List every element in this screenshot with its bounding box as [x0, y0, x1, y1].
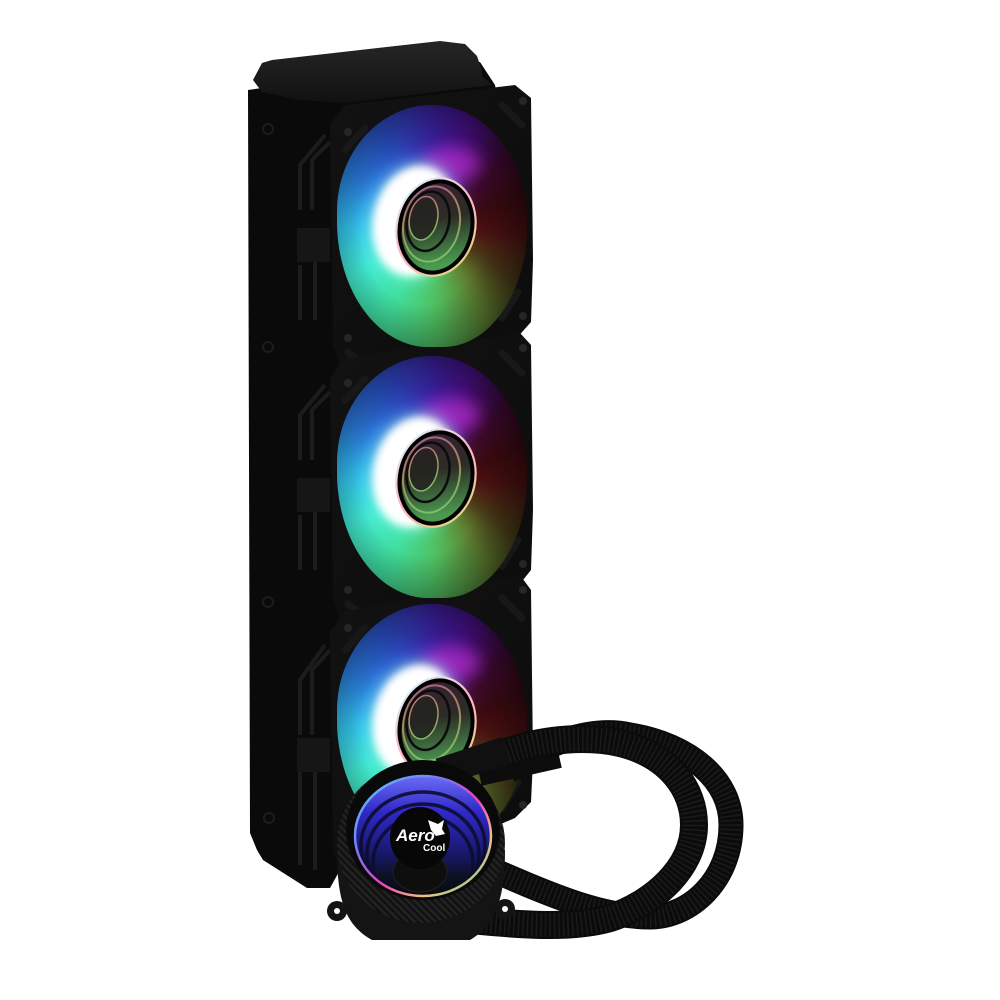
pump and tubes — [327, 720, 744, 940]
radiator fins and struts — [297, 135, 330, 870]
tube: outer braided hose — [470, 733, 731, 917]
fan frame 1 — [330, 85, 533, 380]
radiator top cap — [253, 41, 492, 103]
pump carbon ring — [337, 763, 505, 923]
pump cap — [390, 807, 450, 892]
AeroCool logo — [395, 820, 445, 854]
AeroCool logo: Aero — [395, 826, 435, 845]
pump mounting ears — [327, 899, 515, 921]
fan 3 RGB — [337, 604, 527, 846]
fan frame 3 — [330, 575, 533, 890]
tube connector: upper — [440, 750, 507, 772]
fan 2 RGB — [337, 356, 527, 598]
radiator body — [248, 62, 500, 888]
infinity mirror glass — [355, 776, 491, 910]
tube: inner braided hose — [470, 739, 694, 925]
pump body — [337, 850, 505, 940]
fan 1 RGB — [337, 105, 527, 347]
AeroCool logo: Cool — [423, 843, 445, 854]
fan frame 2 — [330, 333, 533, 636]
tube connector: lower — [480, 760, 560, 778]
pump bezel — [346, 760, 500, 900]
